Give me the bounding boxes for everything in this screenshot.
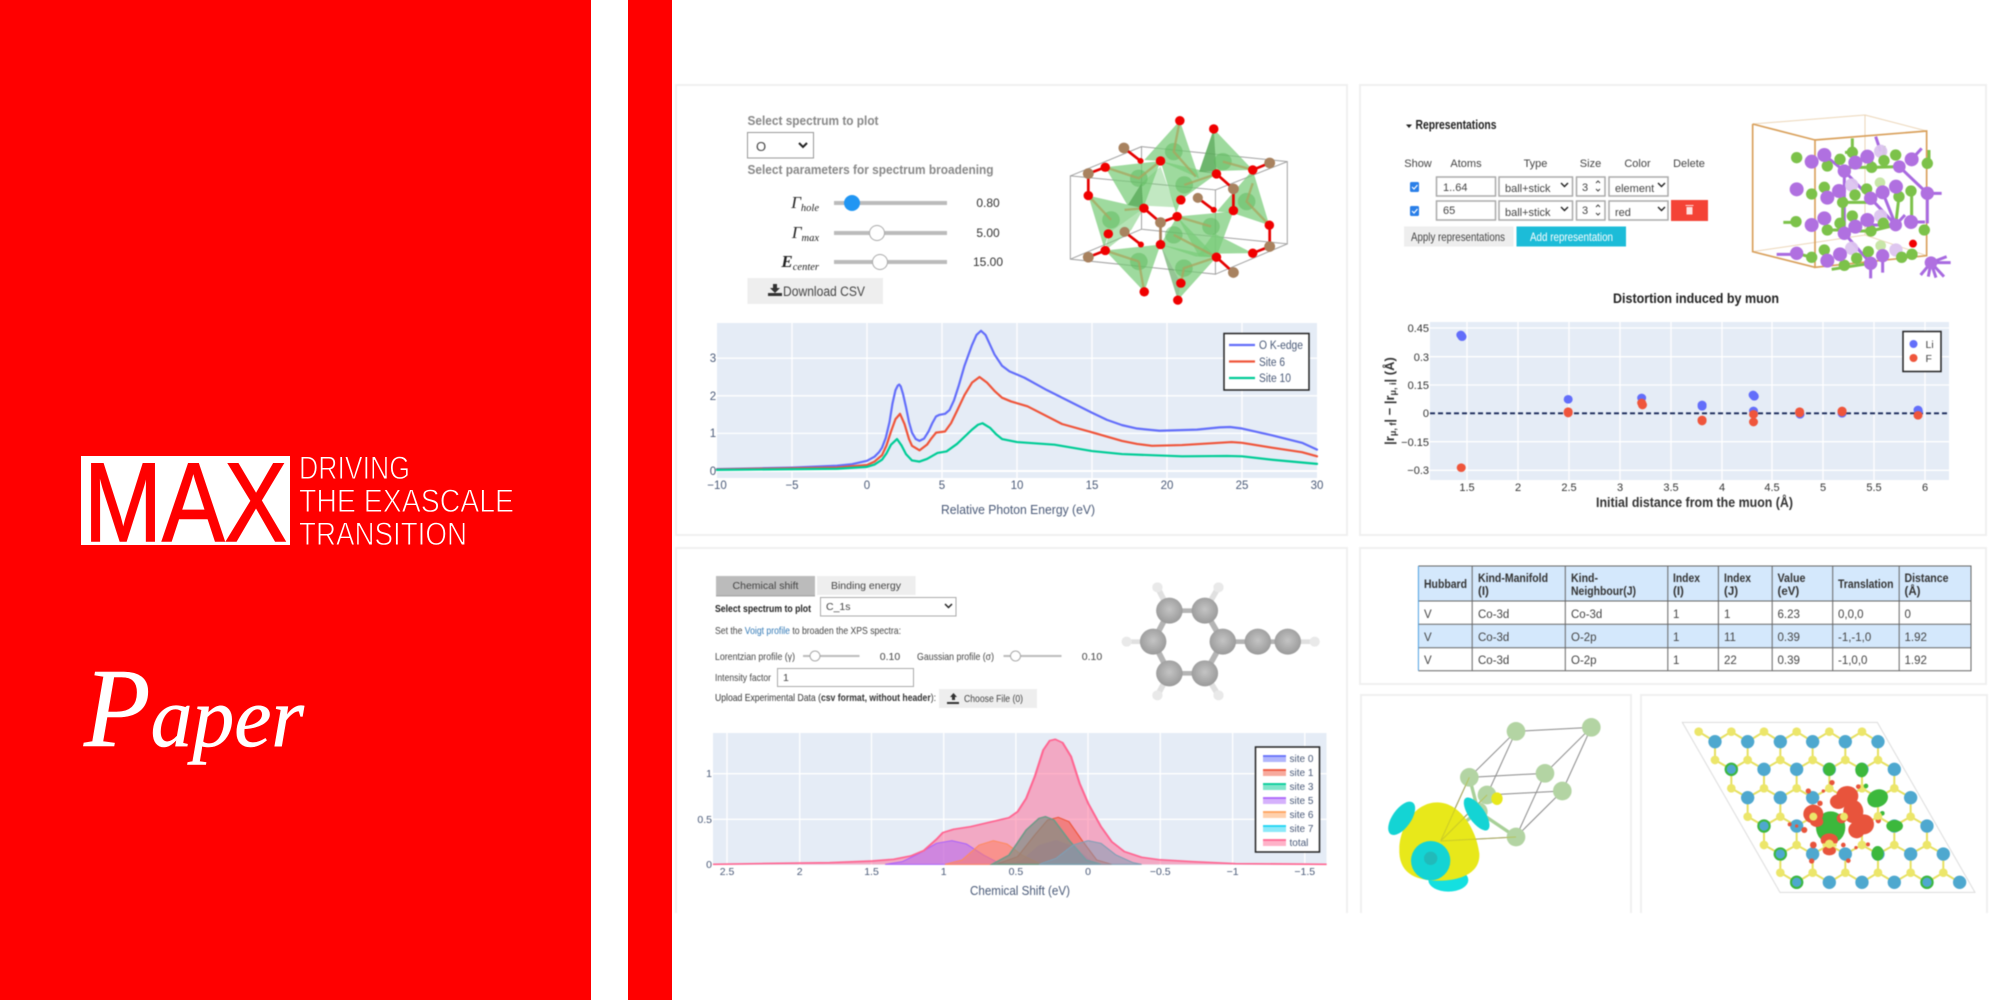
table row 2: 1.92 (1904, 632, 1927, 644)
tab: chemical shift (716, 576, 815, 596)
upload row (715, 689, 1037, 708)
table row 1: 1 (1673, 609, 1679, 621)
spectrum selector label: Select spectrum to plot (748, 113, 879, 128)
tagline: TRANSITION (299, 516, 467, 552)
tab: chemical shift: Chemical shift (733, 580, 799, 592)
axis tick labels: 5 (939, 480, 945, 492)
cyan lobe: front (1411, 841, 1450, 880)
Lorentzian slider: 0.10 (880, 651, 900, 663)
scatter tick labels: 6 (1922, 482, 1928, 494)
table header text: Translation (1838, 579, 1894, 591)
XPS legend (1256, 747, 1320, 852)
cyan lobe: right (1459, 794, 1494, 834)
scatter plot: distortion vs distance: −0.15 (1401, 437, 1429, 449)
representation row 2 (1410, 200, 1708, 221)
table header text: Value (1778, 573, 1806, 585)
green rings (1726, 764, 1933, 888)
scatter tick labels: 3 (1617, 482, 1623, 494)
scatter plot: distortion vs distance (1382, 322, 1949, 510)
table header text: Index (1673, 573, 1701, 585)
table header labels: Atoms (1450, 158, 1482, 170)
y-axis title: | − |r (1382, 395, 1397, 423)
table row 1: V (1424, 609, 1432, 621)
slider: gamma hole: hole (801, 203, 819, 214)
table header labels: Type (1524, 158, 1547, 170)
spectrum dropdown: O (756, 139, 766, 154)
panel: orbital isosurface (1361, 695, 1631, 913)
table row 3: O-2p (1571, 655, 1597, 667)
table header text (1424, 573, 1948, 598)
blue atoms (1708, 735, 1966, 889)
table header labels: Size (1580, 158, 1601, 170)
slider: E center (780, 252, 1003, 273)
table row 2 (1424, 632, 1927, 644)
cyan lobe: left (1383, 797, 1420, 840)
download button (748, 278, 883, 304)
table row 1: 6.23 (1778, 609, 1800, 621)
table row 3: 0.39 (1778, 655, 1800, 667)
table header text: Kind-Manifold (1478, 573, 1548, 585)
table row 2: V (1424, 632, 1432, 644)
representation row 2: ball+stick (1505, 207, 1551, 219)
table row 1 (1424, 609, 1911, 621)
table row 1: Co-3d (1478, 609, 1509, 621)
slider: gamma hole (790, 193, 1000, 214)
representation row 2: 3 (1582, 205, 1588, 217)
green density lobes (1816, 763, 1903, 861)
F points (1457, 399, 1922, 472)
table header text: Index (1724, 573, 1752, 585)
scatter legend: Li (1926, 339, 1934, 351)
Gaussian slider (917, 651, 1102, 663)
XPS selector (715, 598, 956, 616)
red vertical stripe (628, 0, 672, 1000)
scatter tick labels: 1.5 (1459, 482, 1475, 494)
XPS legend: site 0 (1290, 754, 1314, 765)
lattice atoms (1460, 718, 1601, 846)
table header labels (1404, 158, 1705, 170)
table row 1: Co-3d (1571, 609, 1602, 621)
lattice bonds (1440, 727, 1591, 841)
axis tick labels: 20 (1161, 480, 1173, 492)
central atoms over density (1809, 784, 1882, 848)
XPS selector: C_1s (826, 601, 851, 613)
tab: binding energy: Binding energy (831, 580, 902, 592)
table row 3: Co-3d (1478, 655, 1509, 667)
intensity factor: Intensity factor (715, 672, 771, 684)
shaded row (1418, 624, 1971, 648)
XPS legend: site 3 (1290, 782, 1314, 793)
lattice bonds (1699, 732, 1960, 882)
x-axis title: Initial distance from the muon (Å) (1596, 494, 1793, 510)
Li points (1456, 331, 1923, 419)
area chart: XPS chemical shift: 0 (706, 859, 712, 871)
representation row 1: 1..64 (1443, 182, 1467, 194)
table header labels: Show (1404, 158, 1432, 170)
slider: gamma max: max (802, 233, 819, 244)
MAX logo: MAX (84, 440, 287, 565)
slider: E center: 15.00 (973, 255, 1003, 269)
XPS tick labels: 1 (941, 866, 947, 878)
slider: gamma hole: 0.80 (976, 196, 1000, 210)
representation row 2: 65 (1443, 205, 1455, 217)
table header text: Hubbard (1424, 579, 1467, 591)
table header text: Neighbour(J) (1571, 586, 1636, 598)
panel: XPS spectrum tool (676, 548, 1347, 913)
axis tick labels: −10 (707, 480, 727, 492)
scatter legend: F (1926, 353, 1932, 365)
table row 1: 0 (1904, 609, 1911, 621)
table row 3: V (1424, 655, 1432, 667)
table row 2: 0.39 (1778, 632, 1800, 644)
Lorentzian slider: Lorentzian profile (γ) (715, 651, 795, 663)
table header labels: Color (1624, 158, 1651, 170)
table header text: (I) (1673, 586, 1684, 598)
XPS tick labels: −1 (1227, 866, 1239, 878)
scatter tick labels: 3.5 (1663, 482, 1679, 494)
area chart: XPS chemical shift: 1 (706, 768, 712, 780)
XPS tick labels: −1.5 (1294, 866, 1315, 878)
slider: gamma max: 5.00 (976, 226, 1000, 240)
line: total (713, 739, 1327, 864)
axis tick labels (707, 353, 1323, 492)
area: site 5 (885, 841, 1009, 864)
XPS selector: Select spectrum to plot (715, 603, 811, 615)
XPS legend: total (1290, 838, 1308, 849)
axis tick labels: 10 (1011, 480, 1023, 492)
axis tick labels: 0 (864, 480, 870, 492)
area chart: XPS chemical shift: 0.5 (697, 814, 712, 826)
panel: charge density on 2D lattice (1641, 695, 1987, 913)
chart title: Distortion induced by muon (1613, 290, 1779, 306)
scatter tick labels: 5.5 (1866, 482, 1882, 494)
slider: gamma max: Γ (792, 223, 802, 242)
XPS tick labels: 2.5 (720, 866, 734, 878)
tagline: THE EXASCALE (299, 483, 514, 519)
Gaussian slider: Gaussian profile (σ) (917, 651, 994, 663)
table header text: Distance (1904, 573, 1948, 585)
panel: Hubbard table (1360, 548, 1986, 684)
XPS legend: site 5 (1290, 796, 1314, 807)
curve: O K-edge (717, 331, 1317, 469)
area: site 6 (945, 841, 1048, 864)
table row 1: 0,0,0 (1838, 609, 1864, 621)
XPS tick labels (720, 866, 1315, 878)
upload row: Upload Experimental Data (csv format, without header): (715, 692, 936, 704)
add button (1516, 226, 1626, 246)
legend: Site 10 (1259, 373, 1291, 385)
area chart: XPS chemical shift (697, 733, 1327, 898)
representation row 1 (1410, 177, 1668, 196)
representation row 2: red (1615, 207, 1631, 219)
left red panel (0, 0, 591, 1000)
small yellow lobe (1491, 792, 1503, 805)
area: site 1 (996, 817, 1112, 864)
axis tick labels: 3 (710, 353, 716, 365)
table header labels: Delete (1673, 158, 1705, 170)
intensity factor: 1 (783, 672, 789, 684)
y-axis title: | (Å) (1382, 357, 1397, 382)
add button: Add representation (1530, 230, 1613, 244)
axis tick labels: 15 (1086, 480, 1098, 492)
line chart: O K-edge spectrum (707, 323, 1323, 517)
scatter tick labels: 2.5 (1561, 482, 1577, 494)
axis tick labels: 0 (710, 466, 716, 478)
panel: XAS spectrum tool (676, 85, 1347, 535)
legend (1224, 334, 1309, 390)
table row 3: 1 (1673, 655, 1679, 667)
Lorentzian slider (715, 651, 900, 663)
table grid (1418, 566, 1971, 671)
crystal structure: green tetrahedra (1070, 116, 1287, 305)
curve: Site 6 (717, 377, 1317, 469)
XPS tick labels: 2 (797, 866, 803, 878)
tab: binding energy (817, 576, 916, 595)
representations heading: Representations (1416, 118, 1497, 132)
scatter tick labels: 2 (1515, 482, 1521, 494)
scatter tick labels: 4 (1719, 482, 1725, 494)
area: site 3 (992, 817, 1101, 864)
representation row 1: 3 (1582, 182, 1588, 194)
table row 1: 1 (1724, 609, 1730, 621)
representation row 1: ball+stick (1505, 183, 1551, 195)
scatter plot: distortion vs distance: 0.45 (1408, 323, 1429, 335)
table row 3: 22 (1724, 655, 1737, 667)
apply button (1404, 226, 1514, 246)
yellow lobe (1399, 802, 1479, 881)
XPS tick labels: 0.5 (1009, 866, 1023, 878)
legend: Site 6 (1259, 357, 1285, 369)
axis tick labels: 30 (1311, 480, 1323, 492)
table row 3: 1.92 (1904, 655, 1927, 667)
scatter tick labels (1459, 482, 1928, 494)
red density lobes (1788, 780, 1881, 864)
molecule model (1122, 582, 1320, 700)
y-axis title: |r (1382, 436, 1397, 445)
XPS legend: site 1 (1290, 768, 1314, 779)
scatter plot: distortion vs distance: 0 (1423, 408, 1429, 420)
table row 3: -1,0,0 (1838, 655, 1867, 667)
axis tick labels: −5 (785, 480, 799, 492)
yellow atoms (1694, 727, 1948, 877)
XPS tick labels: −0.5 (1150, 866, 1171, 878)
x-axis title: Relative Photon Energy (eV) (941, 502, 1095, 517)
XPS legend: site 7 (1290, 824, 1314, 835)
table row 3 (1424, 655, 1927, 667)
script heading: Paper: Paper (83, 647, 305, 771)
upload row: Choose File (0) (964, 693, 1023, 705)
y-axis title: μ, f (1388, 422, 1398, 436)
slider: E center: E (781, 252, 793, 271)
download button: Download CSV (783, 284, 865, 299)
table row 2: Co-3d (1478, 632, 1509, 644)
crystal structure: purple and green atoms (1753, 115, 1951, 278)
table header text: (Å) (1904, 585, 1921, 598)
panel: muon distortion tool (1360, 85, 1986, 535)
slider: E center: center (793, 262, 820, 273)
slider: gamma max (791, 223, 1000, 244)
XPS axis title: Chemical Shift (eV) (970, 884, 1070, 898)
area: total (713, 739, 1327, 864)
table row 2: 1 (1673, 632, 1679, 644)
spectrum dropdown (748, 132, 814, 158)
header row (1418, 566, 1971, 601)
curve: Site 10 (717, 423, 1317, 470)
Voigt instruction: Set the Voigt profile to broaden the XPS spectra: (715, 625, 901, 637)
representation row 1: element (1615, 183, 1654, 195)
Gaussian slider: 0.10 (1082, 651, 1102, 663)
table header text: (J) (1724, 586, 1738, 598)
axis tick labels: 25 (1236, 480, 1248, 492)
table row 2: 11 (1724, 632, 1736, 644)
delete button (1671, 200, 1708, 221)
supercell outline (1682, 722, 1975, 892)
tagline (299, 450, 514, 552)
table header text: (eV) (1778, 586, 1799, 598)
axis tick labels: 1 (710, 428, 716, 440)
area: site 7 (1039, 841, 1142, 864)
intensity factor (715, 668, 914, 686)
table row 2: -1,-1,0 (1838, 632, 1871, 644)
legend: O K-edge (1259, 340, 1303, 352)
table row 2: O-2p (1571, 632, 1597, 644)
cyan lobe: bottom (1428, 868, 1468, 892)
area: site 5 second peak (1005, 840, 1103, 864)
scatter tick labels: 4.5 (1764, 482, 1780, 494)
XPS legend: site 6 (1290, 810, 1314, 821)
XPS tick labels: 0 (1085, 866, 1091, 878)
broadening label: Select parameters for spectrum broadening (748, 162, 994, 177)
XPS tick labels: 1.5 (864, 866, 879, 878)
axis tick labels: 2 (710, 391, 716, 403)
apply button: Apply representations (1411, 230, 1505, 244)
table header text: Kind- (1571, 573, 1598, 585)
tagline: DRIVING (299, 450, 410, 486)
y-axis title: μ, i (1388, 382, 1398, 395)
scatter legend (1903, 332, 1941, 372)
scatter tick labels: 5 (1820, 482, 1826, 494)
faint lines through the lobe (1441, 777, 1516, 841)
slider: gamma hole: Γ (791, 193, 801, 212)
table header text: (I) (1478, 586, 1489, 598)
scatter plot: distortion vs distance: 0.15 (1408, 380, 1429, 392)
scatter plot: distortion vs distance: −0.3 (1407, 465, 1429, 477)
scatter plot: distortion vs distance: 0.3 (1414, 352, 1429, 364)
